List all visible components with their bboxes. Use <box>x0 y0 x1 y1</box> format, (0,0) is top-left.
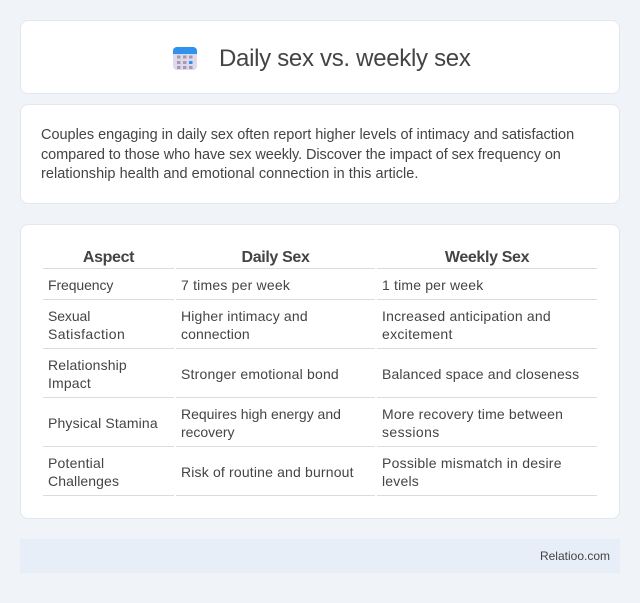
footer brand: Relatioo.com <box>540 549 610 563</box>
panel: title card <box>20 20 620 94</box>
comparison table: 7 times per week <box>181 277 290 293</box>
comparison table: sessions <box>382 424 440 440</box>
row: Potential Challenges: Challenges <box>48 473 119 489</box>
comparison table: More recovery time between <box>382 406 563 422</box>
panel: comparison table card <box>20 224 620 519</box>
header: Aspect: Aspect <box>83 249 134 266</box>
comparison table: Increased anticipation and <box>382 308 551 324</box>
row: Potential Challenges <box>48 455 119 489</box>
header: Weekly Sex: Weekly Sex <box>445 249 529 266</box>
row: Sexual Satisfaction: Satisfaction <box>48 326 125 342</box>
row: Relationship Impact <box>48 357 127 391</box>
title: Daily sex vs. weekly sex <box>219 45 471 72</box>
row: Sexual Satisfaction <box>48 308 125 342</box>
intro paragraph <box>41 127 574 182</box>
comparison table: excitement <box>382 326 453 342</box>
comparison table: Higher intimacy and <box>181 308 308 324</box>
comparison table: levels <box>382 473 419 489</box>
panel: intro text <box>20 104 620 204</box>
intro paragraph: relationship health and emotional connection in this article. <box>41 166 418 182</box>
icon: calendar <box>173 47 197 70</box>
comparison table: Balanced space and closeness <box>382 366 579 382</box>
intro paragraph: Couples engaging in daily sex often report higher levels of intimacy and satisfaction <box>41 127 574 143</box>
intro paragraph: compared to those who have sex weekly. Discover the impact of sex frequency on <box>41 147 561 163</box>
row: Frequency: Frequency <box>48 277 113 293</box>
comparison table: Stronger emotional bond <box>181 366 339 382</box>
comparison table: Requires high energy and <box>181 406 341 422</box>
comparison table: recovery <box>181 424 235 440</box>
row: Sexual Satisfaction: Sexual <box>48 308 90 324</box>
comparison table: 1 time per week <box>382 277 483 293</box>
row: Physical Stamina: Physical Stamina <box>48 415 158 431</box>
row: Relationship Impact: Impact <box>48 375 91 391</box>
row: Potential Challenges: Potential <box>48 455 104 471</box>
footer bar <box>20 539 620 573</box>
comparison table: Risk of routine and burnout <box>181 464 354 480</box>
row: Relationship Impact: Relationship <box>48 357 127 373</box>
comparison table: connection <box>181 326 250 342</box>
comparison table: Possible mismatch in desire <box>382 455 562 471</box>
header: Daily Sex: Daily Sex <box>241 249 310 266</box>
